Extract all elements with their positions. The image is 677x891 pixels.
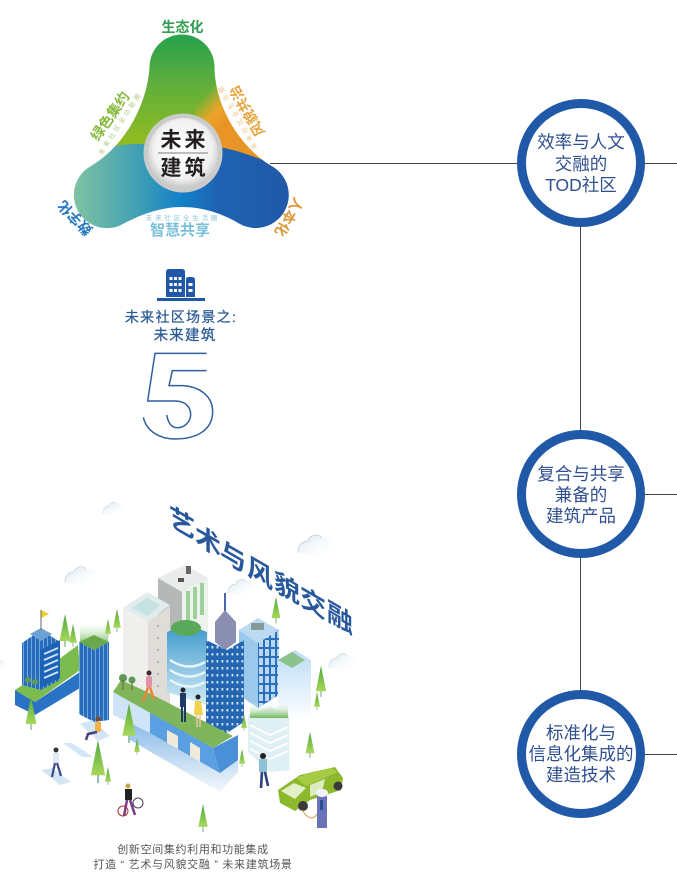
node: standardised construction: 信息化集成的 (528, 744, 634, 764)
left tall tower (79, 620, 109, 722)
caption: 打造 “ 艺术与风貌交融 ” 未来建筑场景 (93, 857, 293, 871)
lower pale building (248, 702, 289, 772)
deck base (130, 715, 238, 792)
label: smart sharing: 智慧共享 (150, 221, 210, 239)
node: standardised construction (522, 694, 640, 814)
node: composite shared products (522, 434, 640, 554)
deck front face (150, 712, 220, 773)
label: style co-governance: 风貌共治 (226, 83, 268, 139)
illustration title (169, 501, 353, 640)
grey tower (158, 565, 208, 655)
people (52, 670, 268, 816)
roof deck (113, 680, 238, 792)
deck left glazing (113, 692, 150, 733)
illustration title: 交 (300, 581, 326, 625)
center badge (144, 114, 222, 192)
illustration title: 术 (195, 519, 221, 563)
center badge: 建筑 (160, 156, 208, 180)
heading: scene title: 未来建筑 (154, 327, 216, 344)
deck side face (213, 735, 238, 773)
node: TOD community: 效率与人文 (537, 132, 625, 152)
deck shrubs (25, 674, 136, 690)
deck green top (113, 680, 233, 748)
heading: scene title: 未来社区场景之: (125, 309, 237, 325)
illustration title: 与 (220, 535, 246, 579)
node: standardised construction: 建造技术 (546, 765, 616, 785)
sub-label: green intensive: 未来社区全功能圈 (96, 89, 144, 157)
right blue tower (239, 597, 280, 708)
illustration title: 貌 (274, 566, 300, 610)
label: green intensive: 绿色集约 (87, 88, 133, 144)
sub-label: style co-governance: 未来社区全生活圈 (215, 83, 259, 151)
connector lines (270, 164, 677, 754)
node: TOD community (522, 104, 640, 222)
walkway tiles (41, 720, 110, 785)
illustration title: 风 (247, 551, 273, 595)
person: cyclist (118, 784, 143, 816)
node: composite shared products: 兼备的 (555, 485, 607, 505)
center badge: 未来 (160, 129, 208, 152)
node: composite shared products: 复合与共享 (537, 464, 625, 484)
dark blue spire tower (206, 593, 244, 733)
node: TOD community: TOD社区 (545, 175, 617, 195)
teal curved tower (167, 620, 207, 705)
label: people-oriented: 人本化 (272, 195, 306, 239)
node: standardised construction: 标准化与 (546, 723, 616, 743)
sub-label: smart sharing: 未来社区全生活圈 (146, 213, 220, 222)
person: man standing (259, 753, 268, 788)
person: walking on path (52, 748, 61, 777)
person: woman talking (194, 694, 203, 727)
pale glass tower (278, 650, 311, 720)
illustration title: 艺 (169, 501, 195, 545)
heading: scene title (125, 309, 237, 344)
label: digital: 数字化 (54, 197, 96, 239)
person: man talking (180, 688, 186, 722)
label: ecological: 生态化 (162, 19, 204, 35)
illustration: art and style blended architecture (0, 501, 357, 871)
left buildings (22, 610, 60, 690)
clouds (0, 502, 357, 670)
trefoil coloured lobes (74, 34, 289, 228)
electric car (278, 767, 343, 811)
trefoil diagram: future architecture (54, 19, 310, 240)
icon: office buildings (157, 269, 205, 301)
caption: 创新空间集约利用和功能集成 (117, 842, 269, 856)
left green podium (15, 645, 80, 715)
caption (93, 842, 293, 871)
illustration title: 融 (327, 596, 353, 640)
deck windows (167, 730, 178, 749)
node: composite shared products: 建筑产品 (546, 506, 616, 526)
white tower (123, 592, 170, 705)
number 5 outline (143, 353, 213, 439)
node: TOD community: 交融的 (555, 154, 607, 174)
person: seated with laptop (86, 716, 101, 740)
person: walking on deck (143, 670, 154, 702)
trees (26, 609, 326, 832)
charging post (302, 789, 328, 828)
